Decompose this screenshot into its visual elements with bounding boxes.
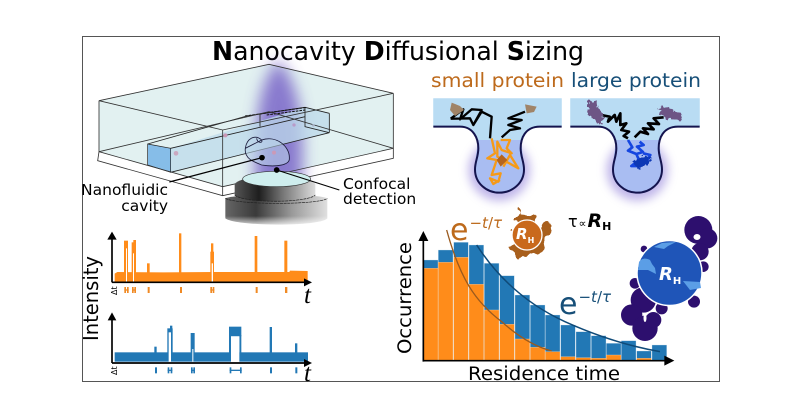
formula: small protein decay: e [450,213,468,248]
tethers [601,113,664,138]
chip edges [98,64,393,196]
panel: large protein cavity [570,98,700,201]
heading: large protein: large protein [571,69,701,92]
orange trace [115,233,308,282]
protein heads [588,101,683,125]
reservoir [570,98,700,127]
formula: large protein decay: e [559,287,577,322]
chip block [98,64,393,196]
pointer: nanofluidic cavity [169,155,265,182]
title: Nanocavity Diffusional Sizing [212,37,584,67]
label: delta t top: Δt [110,286,119,295]
cavity glow [469,139,530,201]
objective lens [222,171,332,227]
radius label: H [673,276,681,287]
blue trace [115,326,308,362]
excitation beam [255,60,303,187]
blue protein chain [628,140,650,166]
label: confocal detection [343,175,416,208]
highlight patches [638,242,701,290]
chart: residence time histogram [418,230,674,366]
formula: proportionality: τ∝R [568,210,602,232]
label: nanofluidic cavity [81,181,168,215]
orange protein chain [487,138,518,184]
radius circle [637,240,702,306]
nanofluidic chip illustration [98,60,393,227]
axes [423,238,667,362]
tethers [451,109,525,138]
white gaps [126,248,213,282]
cavity glow [607,139,668,201]
panel: small protein cavity [433,98,562,201]
axis arrowheads [107,232,312,367]
molecules [174,123,315,156]
pointer: confocal detection [274,167,339,190]
radius label: R [516,225,528,243]
axes [112,238,307,363]
heading: small protein: small protein [431,69,564,92]
formula: proportionality: H [602,220,611,233]
label: time axis bottom: t [304,360,312,387]
label: confocal detection: detection [343,190,416,208]
label: confocal detection: Confocal [343,175,410,193]
icon: large protein hydrodynamic radius [621,216,717,341]
protein blob [511,211,551,259]
protein blob [621,216,717,341]
reservoir [433,98,562,127]
axis arrowheads [418,231,674,366]
blue gaps [169,332,239,362]
protein heads [450,103,464,116]
blue fit [477,245,660,352]
icon: small protein hydrodynamic radius [511,211,551,259]
label: nanofluidic cavity: cavity [121,197,168,215]
frame [82,36,720,382]
label: nanofluidic cavity: Nanofluidic [81,181,168,199]
chart: intensity traces [107,232,312,373]
hole 2 [644,314,646,322]
radius label: R [659,264,673,285]
label: time axis top: t [304,282,312,309]
cavity close-up [245,137,289,166]
blue dwell ticks [155,367,297,373]
label: intensity: Intensity [79,256,103,341]
formula: large protein decay: −t/τ [578,288,611,306]
orange bars [423,257,651,361]
orange dwell ticks [124,287,287,293]
fluidic channel [148,107,329,172]
label: occurrence: Occurrence [395,242,416,354]
orange fit [447,230,552,351]
blue bars [423,242,667,361]
label: residence time: Residence time [468,364,620,385]
label: delta t bottom: Δt [110,366,119,375]
cavity [433,98,562,193]
cavity [570,98,700,193]
formula: small protein decay: −t/τ [469,214,502,232]
radius circle [512,220,542,250]
hole [694,234,700,240]
radius label: H [528,236,534,245]
